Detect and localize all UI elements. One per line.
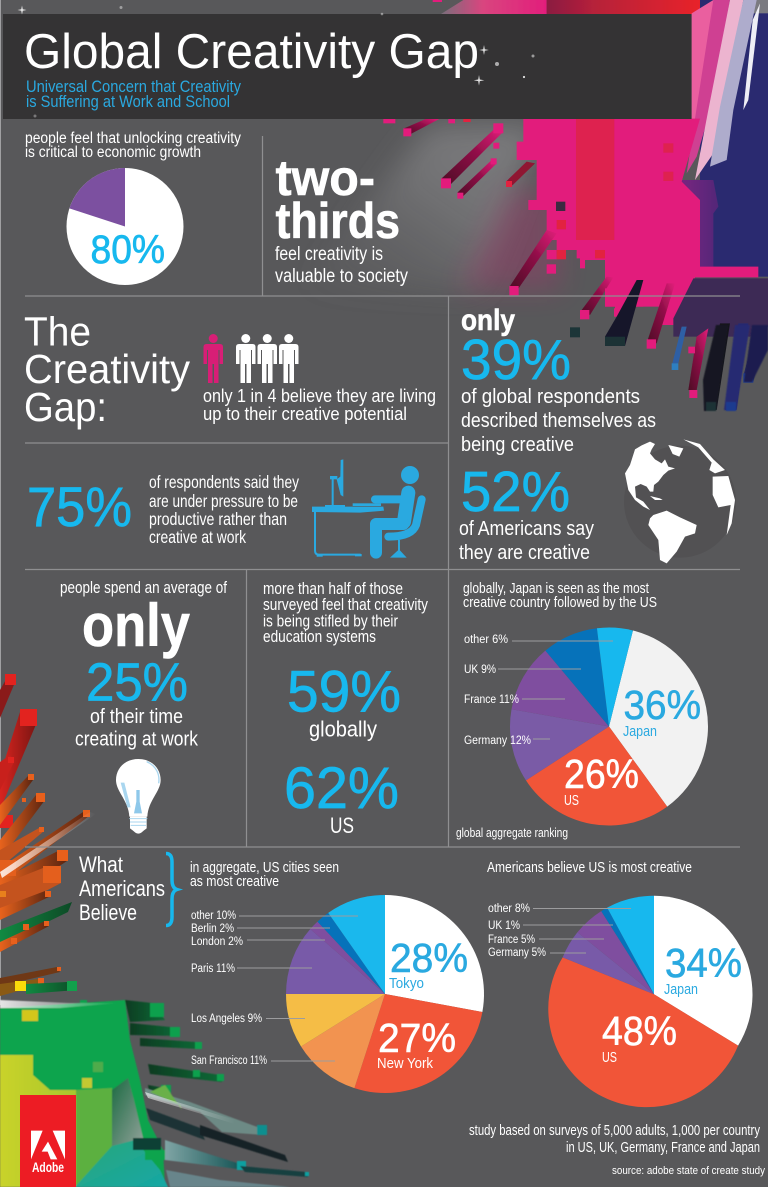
caption: creative country followed by the US [463, 594, 657, 611]
panel: Americans believe [487, 859, 753, 1107]
header band [3, 14, 692, 119]
legend labels: France 5% [488, 934, 535, 946]
caption: people feel that unlocking creativity [25, 130, 241, 147]
label: US 48%: 48% [602, 1008, 677, 1054]
stat: 25%: 25% [86, 652, 188, 712]
label: US 48%: US [602, 1049, 617, 1066]
artwork: light streak bottom [0, 1000, 120, 1008]
caption: surveyed feel that creativity [263, 596, 429, 614]
stat: 62% US: US [330, 813, 354, 838]
panel: global ranking [456, 580, 708, 840]
caption: Americans believe US is most creative [487, 859, 692, 876]
caption: people spend an average of [60, 579, 227, 597]
heading: The Creativity Gap: Creativity [24, 346, 190, 392]
heading: The Creativity Gap: Gap: [24, 384, 107, 430]
artwork: pink tint glow [460, 190, 560, 290]
panel: 80% unlocking creativity [25, 130, 241, 285]
label: only: only [461, 304, 515, 337]
subtitle: Universal Concern that Creativity [26, 77, 241, 96]
label: Japan 36%: 36% [624, 682, 701, 728]
stat: 59% globally: globally [309, 716, 377, 742]
caption: globally, Japan is seen as the most [463, 580, 650, 597]
caption: creating at work: creating at work [75, 728, 199, 750]
caption: 1 in 4 [203, 386, 436, 424]
caption [149, 472, 299, 547]
heading: What Americans Believe: What [79, 852, 123, 877]
caption: valuable to society [275, 266, 408, 287]
caption: global respondents [461, 385, 656, 456]
pie: Americans believe [548, 896, 753, 1107]
panel: education systems [263, 580, 429, 838]
sparkles [18, 6, 534, 118]
logo: Adobe [20, 1095, 76, 1187]
caption: Americans: they are creative [459, 541, 590, 564]
pie: global ranking [510, 628, 708, 825]
panel: 39% creative [459, 304, 736, 564]
icon: people 1 in 4 [204, 334, 298, 383]
stat: 39%: 39% [461, 328, 571, 392]
legend labels [191, 910, 267, 1067]
stat: 80%: 80% [90, 228, 165, 272]
caption [190, 860, 339, 890]
legend labels: France 11% [464, 694, 519, 706]
caption [275, 244, 408, 287]
legend labels: UK 1% [488, 920, 520, 932]
label: New York 27%: 27% [378, 1015, 456, 1061]
heading: What Americans Believe: Americans [79, 876, 165, 901]
heading: The Creativity Gap: The [24, 308, 91, 354]
pie: 80 percent [66, 168, 184, 285]
caption: as most creative [190, 874, 279, 890]
legend labels: Berlin 2% [191, 923, 234, 935]
caption: Americans [459, 517, 595, 564]
legend labels: other 10% [191, 910, 236, 922]
pie: US cities [286, 895, 484, 1093]
caption: in aggregate, US cities seen [190, 860, 339, 876]
icon: brace [166, 854, 177, 926]
label: US 26%: 26% [564, 751, 639, 797]
caption: creating at work: of their time [90, 706, 183, 728]
legend labels [464, 634, 531, 747]
icon: light bulb [116, 759, 161, 834]
artwork: green blocks bottom left [0, 1000, 309, 1187]
artwork: red and orange rays left [0, 674, 96, 996]
legend labels: London 2% [191, 936, 243, 948]
caption: global respondents: of global respondents [461, 385, 640, 408]
caption: Americans: of Americans say [459, 517, 595, 540]
label: Japan 34%: Japan [664, 981, 698, 998]
heading: two-thirds [276, 150, 400, 249]
caption: of respondents said they [149, 472, 299, 492]
leader lines [523, 908, 631, 953]
leader lines [237, 916, 358, 1061]
caption: feel creativity is [275, 244, 383, 265]
legend labels: San Francisco 11% [191, 1055, 267, 1067]
note: global aggregate ranking [456, 826, 568, 840]
panel: 25% of time [60, 579, 227, 834]
icon: person at desk [312, 459, 422, 558]
panel: US cities [190, 860, 484, 1093]
logo: Adobe: Adobe [32, 1160, 64, 1175]
icon: globe [624, 439, 736, 563]
heading: What Americans Believe: Believe [79, 900, 137, 925]
subtitle [26, 77, 241, 111]
legend labels [488, 903, 546, 959]
caption [463, 580, 657, 611]
label: Japan 34%: 34% [665, 940, 742, 986]
caption: creative at work [149, 527, 246, 547]
leader lines [498, 641, 613, 739]
caption: are under pressure to be [149, 491, 298, 511]
artwork: magenta splash top right [383, 0, 768, 410]
label: Japan 36%: Japan [623, 723, 657, 740]
caption: global respondents: described themselves as [461, 409, 656, 432]
label: only: only [82, 592, 191, 659]
caption [25, 130, 241, 161]
caption: creating at work [75, 706, 199, 750]
panel: 75% under pressure [27, 459, 422, 558]
dividers [25, 136, 740, 847]
caption: is being stifled by their [263, 612, 398, 630]
caption: 1 in 4: up to their creative potential [203, 404, 407, 424]
artwork: lower bars right [703, 325, 768, 411]
legend labels: other 6% [464, 634, 508, 646]
label: US 26%: US [564, 792, 579, 809]
heading: two-thirds: thirds [276, 193, 400, 249]
legend labels: Los Angeles 9% [191, 1013, 262, 1025]
caption: is critical to economic growth [25, 144, 201, 161]
stat: 75%: 75% [27, 475, 132, 538]
label: New York 27%: New York [377, 1056, 434, 1072]
heading: two-thirds: two- [276, 150, 375, 206]
stat: 52%: 52% [461, 460, 570, 524]
stat: 62% US: 62% [284, 756, 399, 821]
study note [469, 1123, 761, 1156]
title: Global Creativity Gap [24, 25, 479, 79]
artwork: light streak left [0, 812, 96, 878]
artwork: soft grey glow [300, 125, 540, 290]
caption [263, 580, 429, 646]
subtitle: is Suffering at Work and School [26, 92, 230, 111]
panel: two-thirds [275, 150, 408, 287]
legend labels: Germany 5% [488, 947, 546, 959]
heading: The Creativity Gap [24, 308, 190, 430]
caption: more than half of those [263, 580, 403, 598]
label: Tokyo 28%: Tokyo [389, 976, 424, 992]
caption: productive rather than [149, 509, 287, 529]
legend labels: Germany 12% [464, 735, 531, 747]
caption: global respondents: being creative [461, 433, 574, 456]
legend labels: Paris 11% [191, 963, 235, 975]
heading: What Americans Believe [79, 852, 165, 925]
caption: 1 in 4: only 1 in 4 believe they are living [203, 386, 436, 406]
legend labels: UK 9% [464, 664, 496, 676]
stat: 59% globally: 59% [287, 660, 401, 724]
caption: education systems [263, 628, 376, 646]
legend labels: other 8% [488, 903, 530, 915]
label: Tokyo 28%: 28% [390, 935, 468, 981]
